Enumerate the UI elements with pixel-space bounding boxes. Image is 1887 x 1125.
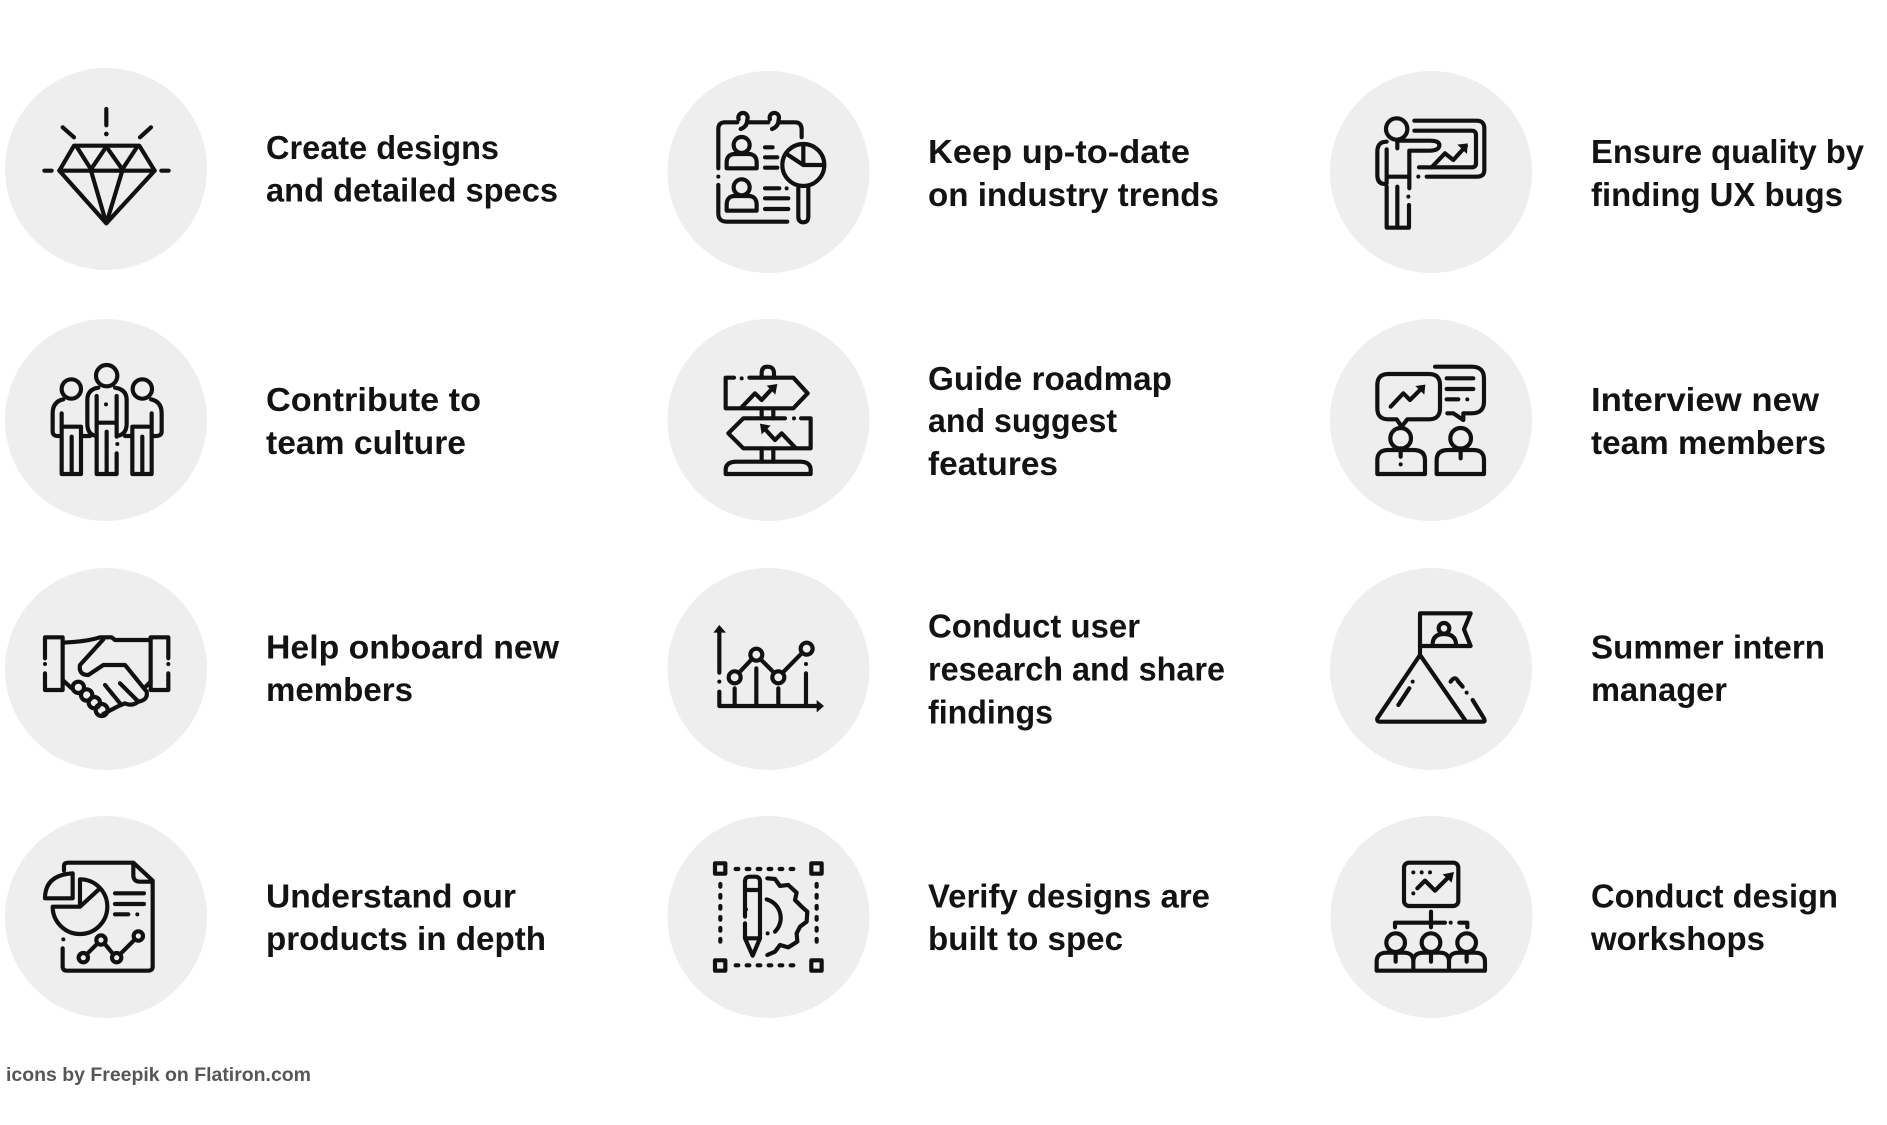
item: industry trends xyxy=(668,71,1219,273)
circle background xyxy=(1330,71,1532,273)
item: user research xyxy=(668,568,1225,770)
icon: pencil and gear xyxy=(715,863,822,971)
text: Guide roadmap xyxy=(928,360,1172,397)
text: team culture xyxy=(266,424,466,461)
circle background xyxy=(668,816,870,1018)
item: team culture xyxy=(5,319,481,521)
text: members xyxy=(266,671,413,708)
item: guide roadmap xyxy=(668,319,1172,521)
circle background xyxy=(668,319,870,521)
icon: two people talking xyxy=(1377,367,1484,474)
text: Contribute to xyxy=(266,381,481,418)
item: onboard xyxy=(5,568,559,770)
text: Verify designs are xyxy=(928,878,1210,914)
circle background xyxy=(5,68,207,270)
icon: three people xyxy=(53,365,162,474)
text: and suggest xyxy=(928,402,1117,439)
icon: audience and screen xyxy=(1377,863,1485,971)
item: create designs xyxy=(5,68,558,270)
text: Understand our xyxy=(266,878,516,914)
item: ensure quality xyxy=(1330,71,1865,273)
circle background xyxy=(1330,816,1532,1018)
text: Create designs xyxy=(266,129,499,166)
icon: flag on mountain xyxy=(1377,613,1485,722)
text: team members xyxy=(1591,424,1826,461)
icon: line chart xyxy=(713,625,824,712)
text: finding UX bugs xyxy=(1591,176,1843,213)
icon: notebook and magnifier xyxy=(716,113,824,222)
text: Summer intern xyxy=(1591,628,1825,666)
credit line: icons by Freepik on Flatiron.com xyxy=(6,1065,311,1086)
circle background xyxy=(5,319,207,521)
circle background xyxy=(1330,319,1532,521)
circle background xyxy=(668,71,870,273)
icon: handshake xyxy=(43,637,170,716)
item: intern manager xyxy=(1330,568,1825,770)
text: Conduct design xyxy=(1591,878,1838,914)
text: manager xyxy=(1591,671,1727,708)
circle background xyxy=(668,568,870,770)
text: Keep up-to-date xyxy=(928,133,1190,170)
text: workshops xyxy=(1590,920,1765,957)
text: Ensure quality by xyxy=(1591,133,1865,170)
circle background xyxy=(5,816,207,1018)
text: Conduct user xyxy=(928,608,1140,644)
icon: report document xyxy=(45,863,153,971)
text: features xyxy=(928,445,1058,482)
item: interview xyxy=(1330,319,1826,521)
text: Interview new xyxy=(1591,381,1819,418)
icon: signpost xyxy=(726,367,811,474)
text: research and share xyxy=(928,650,1225,688)
item: understand products xyxy=(5,816,546,1018)
item: design workshops xyxy=(1330,816,1838,1018)
circle background xyxy=(1330,568,1532,770)
icon: diamond xyxy=(44,109,169,223)
text: built to spec xyxy=(928,920,1123,957)
circle background xyxy=(5,568,207,770)
text: and detailed specs xyxy=(266,172,558,208)
item: verify designs xyxy=(668,816,1210,1018)
text: products in depth xyxy=(266,920,546,957)
text: on industry trends xyxy=(928,176,1219,213)
text: findings xyxy=(928,694,1053,730)
icon: presenter at board xyxy=(1377,118,1484,228)
text: Help onboard new xyxy=(266,628,559,666)
